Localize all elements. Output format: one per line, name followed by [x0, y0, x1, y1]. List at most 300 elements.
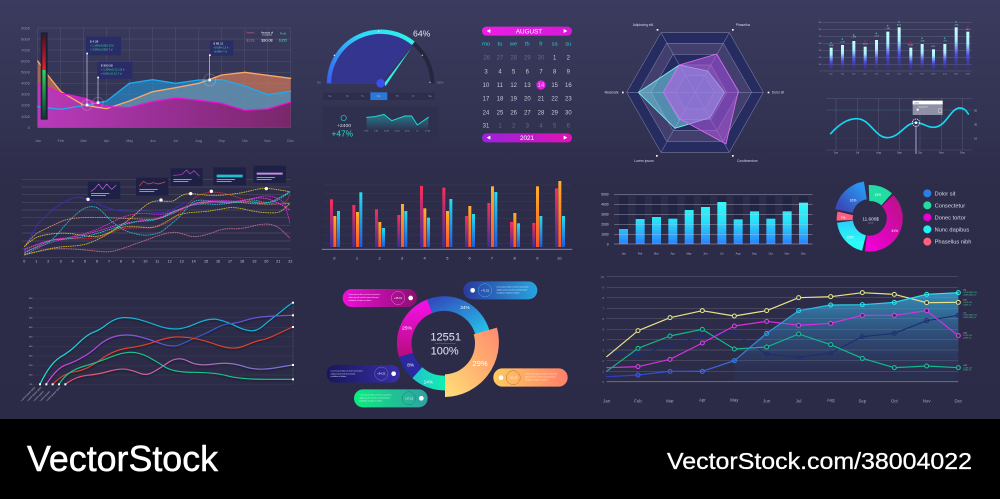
radar labels: Lorem ipsum	[634, 159, 654, 163]
calendar days	[483, 56, 572, 130]
monthly x labels: May	[686, 252, 692, 256]
radar labels: Adipiscing elit.	[633, 23, 654, 27]
wave line chart: 30	[974, 123, 978, 127]
wave line chart: Jul	[856, 151, 859, 155]
month labels: Aug	[195, 139, 202, 143]
donut chart: 22%	[847, 236, 854, 240]
y axis labels: 2000	[21, 103, 31, 108]
calendar days: 19	[510, 97, 518, 103]
glowing bar chart: + 2.08	[851, 37, 856, 39]
series end labels: +1.22% (USD) 13 h	[963, 315, 977, 317]
cyan bars	[337, 192, 565, 247]
gauge tabs: We	[377, 94, 381, 98]
x axis numbers: 13	[180, 260, 184, 264]
glowing bar chart: $ 0.85	[908, 45, 913, 47]
bar group labels: 10	[557, 256, 562, 261]
calendar days: 26	[510, 111, 518, 117]
callout: March: + 3.69% (USD) 7 d	[90, 47, 113, 51]
x axis numbers: 15	[204, 260, 208, 264]
callout: March: + 1.15% (USD) 13 h	[90, 43, 114, 47]
x axis numbers: 8	[120, 260, 122, 264]
glowing bar chart: + 4.85	[954, 24, 958, 26]
calendar	[482, 27, 572, 142]
panel: gauge and calendar	[317, 27, 572, 142]
wave line chart: 50	[974, 109, 978, 113]
stats card: 12	[416, 131, 418, 133]
y axis labels: 8000	[21, 36, 31, 41]
monthly x labels: Oct	[769, 252, 773, 256]
y labels: 2	[602, 359, 604, 363]
month labels: Mar	[81, 139, 88, 143]
smooth y labels: 200	[29, 365, 33, 367]
pill: indigo: Lorem ipsum dolor sit amet consectetur	[331, 370, 363, 373]
y labels	[601, 275, 604, 384]
y labels: 8	[602, 296, 604, 300]
chart legend: Profit	[280, 31, 286, 35]
month labels: Jul	[173, 139, 178, 143]
wave chart tooltip: Day 56.78	[918, 107, 928, 109]
calendar days: 2	[512, 124, 516, 130]
donut legend: Consectetur	[935, 203, 965, 209]
bar group labels: 7	[491, 256, 494, 261]
pill: magenta: incididunt ut labore et dolore	[348, 299, 371, 302]
glowing bar chart: $ 0.60	[863, 43, 867, 45]
pill: green: +27.15	[405, 396, 414, 400]
y axis labels: 0	[28, 125, 31, 130]
donut legend: Phasellus nibh	[935, 240, 971, 246]
smooth y labels: 600	[29, 327, 33, 329]
calendar days: 4	[498, 69, 502, 75]
callout: March	[82, 37, 121, 110]
mini chart cards	[88, 166, 286, 199]
chart legend: $355	[279, 39, 287, 43]
gauge tabs: M	[346, 94, 348, 98]
pill: green	[354, 389, 428, 407]
monthly y labels	[601, 193, 609, 246]
pill: magenta: Lorem ipsum dolor sit amet consectetur	[348, 293, 381, 296]
donut legend: Nunc dapibus	[935, 227, 969, 233]
calendar days: 20	[524, 97, 531, 103]
radar series: purple	[663, 54, 738, 144]
month labels: Aug	[827, 398, 835, 403]
calendar days: 10	[483, 83, 490, 89]
stats card: +2400	[337, 123, 351, 129]
panel: monthly bars and donut legend	[601, 189, 971, 256]
dashed series lines	[24, 189, 290, 255]
calendar days: 5	[512, 69, 516, 75]
calendar days: 31	[483, 124, 490, 130]
x axis numbers: 3	[60, 260, 62, 264]
glowing bar chart: + 1.96	[840, 41, 845, 43]
series: purple	[607, 309, 960, 369]
series end labels: +3.69% (USD) 7 d	[963, 317, 976, 319]
stats card: 10:30	[384, 131, 390, 133]
month labels: Apr	[699, 398, 706, 403]
x axis numbers: 2	[47, 260, 49, 264]
callout: April: $ 900.58	[101, 63, 113, 67]
month labels: Oct	[891, 398, 898, 403]
pill: orange: +11.20	[509, 376, 518, 380]
stats card: 9:00	[364, 131, 369, 133]
series end labels: +9.6	[963, 290, 966, 292]
glowing bar chart: 800	[819, 29, 821, 31]
series end labels: +1.15% 13 h	[963, 367, 972, 369]
calendar days: 6	[567, 124, 571, 130]
ring center total	[430, 331, 461, 358]
ring chart: 14%	[424, 379, 433, 384]
y labels: 5	[602, 328, 604, 332]
x axis numbers: 18	[240, 260, 244, 264]
pill: orange: adipiscing elit sed do eiusmod tempor	[525, 375, 556, 378]
glowing bar chart: 900	[819, 22, 821, 24]
gauge tabs: Sa	[428, 94, 432, 98]
wave chart tooltip: Label	[914, 102, 919, 104]
bar group labels: 9	[536, 256, 539, 261]
stats card: 11:30	[405, 131, 410, 133]
pill: indigo: adipiscing elit sed do eiusmod	[331, 372, 355, 375]
y axis labels: 7000	[21, 47, 31, 52]
glowing bar chart: 5:00	[875, 74, 878, 76]
panel: radar chart and top right charts	[605, 21, 978, 163]
calendar days: 9	[567, 69, 571, 75]
month labels: Mar	[666, 398, 674, 403]
month labels: Jul	[796, 398, 801, 403]
monthly x labels: Dec	[801, 252, 806, 256]
calendar days: 18	[497, 97, 504, 103]
calendar days: 29	[524, 56, 531, 62]
diagonal series labels: Lorem ipsum dolor	[27, 386, 42, 402]
radar labels: Moderate	[605, 91, 619, 95]
glowing bar chart: 6:00	[886, 74, 889, 76]
glowing bar chart: 7:00	[897, 74, 901, 76]
gauge tabs: Fr	[412, 94, 415, 98]
y axis labels: 6000	[21, 59, 31, 64]
calendar days: 16	[565, 83, 572, 89]
bar group labels: 6	[469, 256, 472, 261]
x axis numbers: 6	[96, 260, 98, 264]
calendar days: 14	[538, 83, 545, 89]
magenta area series	[38, 83, 291, 128]
calendar days: 28	[510, 56, 518, 62]
panel: layered area chart	[21, 25, 294, 143]
panel: smooth line chart	[20, 298, 294, 402]
calendar days: 2	[567, 56, 571, 62]
red bars	[330, 186, 558, 247]
callout: April: + 1.30% (U.S.) 13 h	[101, 67, 125, 71]
wave line chart: Nov	[939, 151, 944, 155]
calendar days: 24	[483, 111, 490, 117]
weekday row	[482, 41, 571, 47]
monthly x labels: Feb	[638, 252, 643, 256]
bar chart axis	[322, 248, 572, 251]
x axis numbers: 22	[288, 260, 292, 264]
series end labels: +1.15% 13 h	[963, 302, 972, 304]
radar labels	[605, 23, 784, 163]
chart legend: $30.08	[261, 39, 273, 43]
vertical meter	[41, 32, 48, 120]
monthly y labels: 4000	[601, 203, 609, 207]
bar group labels: 2	[379, 256, 382, 261]
glowing bar chart: 1:00	[829, 74, 833, 76]
y axis labels	[21, 25, 31, 130]
ring chart: 8%	[407, 363, 414, 368]
bar chart grid	[323, 185, 570, 243]
bar group labels: 5	[446, 256, 449, 261]
month labels: Dec	[954, 398, 963, 403]
x axis numbers: 21	[276, 260, 280, 264]
month labels: Nov	[923, 398, 931, 403]
y axis labels: 4000	[21, 81, 31, 86]
ring center total: 100%	[431, 346, 459, 358]
diagonal series labels	[20, 386, 61, 402]
monthly y labels: 1000	[601, 233, 609, 237]
pill: indigo	[327, 365, 400, 383]
monthly y labels: 3000	[601, 213, 609, 217]
pill: blue: Lorem ipsum dolor sit amet consectetur	[497, 285, 529, 288]
glowing bar chart: 400	[819, 57, 821, 59]
glowing bar chart: $ 4.2	[966, 29, 970, 31]
calendar days: 3	[526, 124, 530, 130]
orange area series	[38, 61, 291, 128]
footer image id: VectorStock.com/38004022	[667, 448, 972, 474]
pill: orange: incididunt ut labore et dolore	[525, 378, 548, 381]
calendar month header: AUGUST	[516, 29, 542, 36]
glowing bar chart: 11:00	[943, 74, 947, 76]
month labels: Jun	[150, 139, 156, 143]
stats card: 11:00	[395, 131, 400, 133]
ring chart: 25%	[402, 326, 413, 332]
y labels: 6	[602, 317, 604, 321]
radar series: cyan	[638, 65, 724, 128]
monthly x labels	[622, 252, 806, 256]
month labels: May	[730, 398, 739, 403]
series end labels: +0.96% 7 d	[963, 304, 971, 306]
calendar days: 28	[538, 111, 545, 117]
monthly x labels: Nov	[785, 252, 790, 256]
chart legend: Market	[246, 31, 255, 35]
x axis numbers: 11	[155, 260, 159, 264]
calendar days: 23	[565, 97, 572, 103]
wave line chart: Oct	[918, 151, 922, 155]
month labels: Jun	[763, 398, 771, 403]
smooth y labels: 0%	[29, 384, 33, 386]
stats card: 12:30	[425, 131, 431, 133]
panel: yearly line chart with markers	[601, 275, 977, 403]
highlighted points	[86, 187, 268, 202]
diagonal series labels: Lorem ipsum dolor	[46, 386, 61, 402]
monthly x labels: Jan	[622, 252, 626, 256]
wave line chart: Aug	[876, 151, 882, 155]
series end labels: +7.5	[963, 312, 966, 314]
chart legend: $128	[246, 39, 254, 43]
wave line chart: Sep	[897, 151, 902, 155]
y labels: 10	[601, 275, 604, 279]
x axis numbers: 10	[143, 260, 147, 264]
calendar days: 30	[538, 56, 545, 62]
radar labels: Condimentum	[737, 159, 758, 163]
month labels: Apr	[104, 139, 110, 143]
smooth y labels: 300	[29, 356, 33, 358]
y labels: 0	[602, 380, 604, 384]
calendar days: 11	[497, 83, 504, 89]
series end labels	[963, 290, 977, 372]
glowing bar chart: $ 0.85	[829, 45, 833, 47]
glowing bar chart: 300	[819, 64, 821, 66]
y axis labels: 9000	[21, 25, 31, 30]
pill: blue	[463, 281, 537, 299]
donut chart: Lorem	[868, 221, 874, 224]
x axis numbers: 16	[216, 260, 220, 264]
diagonal series labels: Lorem ipsum	[33, 390, 45, 402]
gauge: 64%	[413, 29, 431, 39]
diagonal series labels: Lorem ipsum	[39, 390, 51, 402]
chart legend	[246, 31, 287, 43]
glowing bar chart: $ 0.5	[931, 46, 935, 48]
monthly x labels: Aug	[736, 252, 741, 256]
area chart grid	[38, 28, 291, 128]
diagonal series labels: Lorem ipsum dolor	[20, 386, 36, 402]
x axis numbers: 5	[84, 260, 86, 264]
glowing bar chart: 3:00	[852, 74, 855, 76]
gauge tabs: Th	[396, 94, 399, 98]
y axis labels: 5000	[21, 70, 31, 75]
ring chart: 24%	[460, 305, 470, 310]
glowing bar chart: 0	[820, 71, 821, 73]
pill: magenta: adipiscing elit sed do eiusmod tempor	[348, 296, 379, 299]
calendar days: 6	[526, 69, 530, 75]
monthly y labels: 2000	[601, 223, 609, 227]
pill: indigo: +34.21	[377, 372, 386, 376]
weekday row: mo	[482, 41, 490, 47]
footer band	[0, 419, 1000, 499]
callout: August: +0.96% 7 d	[213, 49, 227, 53]
monthly x labels: Jun	[703, 252, 708, 256]
wave line chart	[826, 98, 978, 155]
series lines	[38, 61, 291, 110]
x axis numbers: 1	[35, 260, 37, 264]
gauge	[317, 29, 444, 88]
calendar days: 5	[553, 124, 557, 130]
month labels	[35, 139, 294, 143]
glowing bar chart: + 4.80	[885, 28, 890, 30]
wave line chart: Dec	[960, 151, 966, 155]
weekday row: tu	[498, 41, 502, 47]
glowing bar chart: 500	[819, 50, 821, 52]
calendar days: 21	[538, 97, 545, 103]
weekday row: we	[509, 41, 517, 47]
monthly grid lines	[614, 194, 813, 244]
calendar year footer: 2021	[520, 135, 535, 142]
pill: magenta	[343, 289, 417, 307]
series end labels: +3.69% (USD) 7 d	[963, 294, 976, 296]
glowing bar chart: 10:00	[931, 74, 935, 76]
weekday row: fr	[539, 41, 543, 47]
smooth chart grid	[33, 298, 293, 384]
start and end markers	[39, 302, 294, 385]
pill: magenta: +45.61	[394, 296, 403, 300]
radar labels: Dolor sit	[772, 91, 784, 95]
y axis labels: 1000	[21, 114, 31, 119]
pill: orange: Lorem ipsum dolor sit amet consectetur	[525, 372, 557, 375]
chart legend: investment	[262, 34, 272, 37]
month labels: Oct	[242, 139, 248, 143]
y labels: 7	[602, 307, 604, 311]
chart legend: Amount of	[261, 31, 273, 35]
series end labels: +8.17	[963, 300, 967, 302]
pill: orange	[493, 368, 568, 387]
x axis numbers: 14	[192, 260, 196, 264]
month labels: May	[126, 139, 133, 143]
ring center total: 12551	[430, 331, 461, 343]
series: cyan	[607, 291, 960, 377]
donut chart: 16%	[850, 198, 856, 202]
glowing bar chart: 12:00	[954, 74, 958, 76]
glowing bar chart: 700	[819, 36, 821, 38]
donut legend: Dolor sit	[935, 191, 956, 197]
radar labels: Phasellus	[736, 23, 751, 27]
stats card	[323, 107, 438, 142]
series end labels: +0.96% 7 d	[963, 370, 971, 372]
donut legend	[923, 189, 971, 246]
smooth y labels: 400	[29, 346, 33, 348]
series end labels: +1.15% 13 h	[963, 335, 972, 337]
callout: August: $ 89.21	[213, 42, 224, 46]
smooth y labels: 500	[29, 336, 33, 338]
stats card: 9:30	[374, 131, 379, 133]
y labels: 1	[602, 370, 604, 374]
y axis labels: 3000	[21, 92, 31, 97]
x axis numbers: 0	[23, 260, 25, 264]
gauge: 100%	[437, 81, 444, 85]
monthly y labels: 0	[607, 242, 609, 246]
calendar days: 12	[510, 83, 518, 89]
radar chart	[605, 23, 784, 163]
weekday row: su	[565, 41, 571, 47]
calendar days: 22	[551, 97, 559, 103]
stats card: +47%	[332, 129, 354, 139]
monthly bars	[619, 202, 808, 244]
series end labels: +1.22% (USD) 13 h	[963, 292, 977, 294]
bar group labels: 0	[333, 256, 336, 261]
calendar days: 1	[553, 56, 557, 62]
calendar days: 15	[551, 83, 559, 89]
calendar days: 8	[553, 69, 557, 75]
donut legend: Donec tortor	[935, 215, 966, 221]
calendar days: 26	[483, 56, 491, 62]
wave chart tooltip	[913, 101, 943, 115]
panel: segmented ring with pills	[327, 281, 568, 407]
wave line chart: Jun	[834, 151, 839, 155]
x axis numbers	[23, 260, 292, 264]
pill: blue: adipiscing elit sed do eiusmod tempor	[497, 288, 528, 291]
donut chart: 7%	[841, 216, 845, 220]
calendar days: 3	[484, 69, 488, 75]
bar group labels: 8	[514, 256, 517, 261]
y labels: 3	[602, 348, 604, 352]
smooth y labels: 900	[29, 298, 33, 300]
month labels: Dec	[287, 139, 294, 143]
calendar days: 27	[524, 111, 531, 117]
callout: August	[204, 41, 233, 86]
blue area series	[38, 80, 291, 128]
x axis numbers: 9	[132, 260, 134, 264]
calendar days: 30	[565, 111, 572, 117]
glowing bar chart: + 2.9	[943, 41, 947, 43]
gauge: 0%	[317, 81, 322, 85]
calendar days: 1	[498, 124, 502, 130]
donut chart: 11.600$	[862, 216, 879, 221]
donut chart	[841, 190, 898, 244]
